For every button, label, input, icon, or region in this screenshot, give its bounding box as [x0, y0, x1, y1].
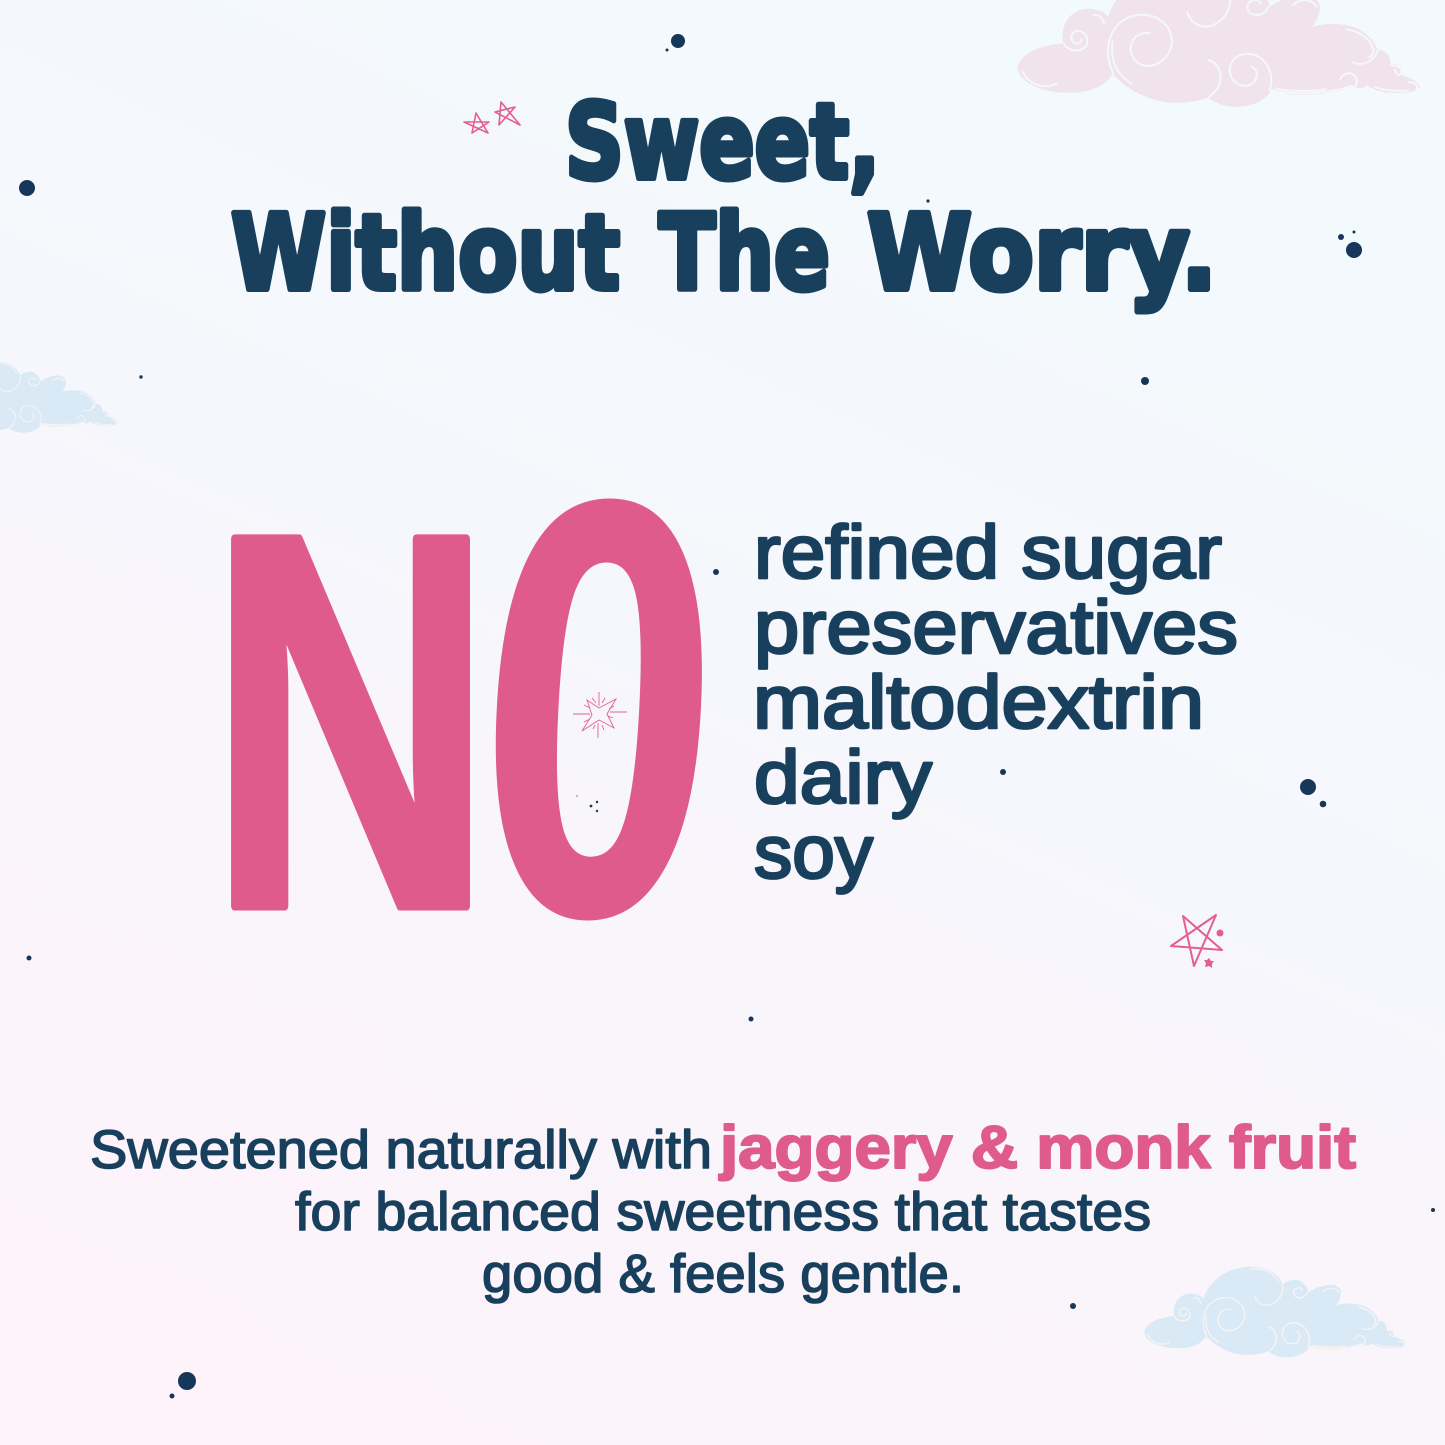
cloud: pink top right	[1017, 0, 1419, 107]
title: The	[659, 192, 830, 314]
list of excluded ingredients: maltodextrin	[753, 660, 1204, 744]
closing statement: Sweetened naturally with	[90, 1120, 712, 1180]
closing statement: good & feels gentle.	[482, 1244, 964, 1304]
title: Sweet,	[565, 81, 880, 203]
big word NO	[208, 385, 723, 1022]
title: Without	[231, 192, 620, 314]
list of excluded ingredients: preservatives	[754, 585, 1238, 669]
list of excluded ingredients: dairy	[754, 735, 933, 819]
icon: sparkle inside O	[573, 692, 627, 738]
big word NO: N	[208, 424, 493, 1020]
big word NO: O	[475, 385, 723, 1022]
title	[231, 81, 1217, 314]
icon: pink stars near title	[464, 102, 520, 133]
closing statement: jaggery & monk fruit	[719, 1114, 1356, 1181]
cloud: blue bottom right	[1144, 1267, 1406, 1357]
list of excluded ingredients	[753, 510, 1238, 894]
title: Worry.	[867, 192, 1217, 314]
closing statement: for balanced sweetness that tastes	[295, 1182, 1151, 1242]
closing statement	[90, 1114, 1356, 1304]
list of excluded ingredients: refined sugar	[754, 510, 1222, 594]
list of excluded ingredients: soy	[754, 810, 874, 894]
cloud: blue left edge	[0, 361, 117, 433]
icon: pink pentagram star	[1171, 915, 1224, 968]
